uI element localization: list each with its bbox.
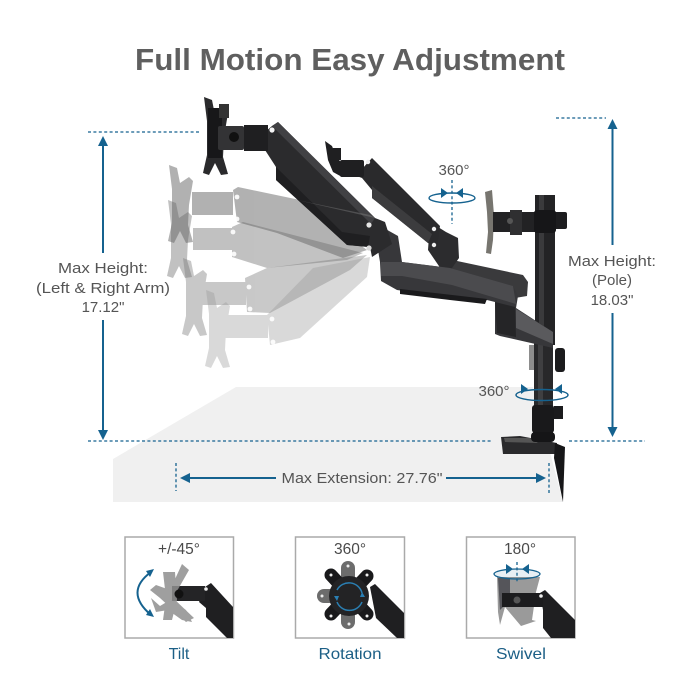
ghost pivots: [231, 195, 275, 344]
left height label: (Left & Right Arm): [36, 280, 170, 297]
panel: tilt: [125, 537, 234, 663]
right height label: (Pole): [592, 272, 632, 289]
panel: rotation: 360°: [334, 541, 366, 558]
upper arm: [265, 122, 392, 257]
right height dimension: [556, 118, 645, 441]
pole rotation 360 indicator: 360°: [478, 383, 510, 400]
ghost position 3: [182, 255, 367, 336]
first arm lower section: [378, 227, 553, 348]
ghost position 4: [205, 257, 370, 368]
ghost position 1: [168, 165, 367, 258]
right height label: Max Height:: [568, 253, 656, 270]
icon: tilting monitor mount: [138, 564, 233, 638]
right height label: 18.03": [591, 292, 633, 309]
left height label: Max Height:: [58, 260, 148, 277]
small monitor bracket: [325, 141, 364, 177]
right height label: [568, 253, 656, 309]
desk surface: [113, 387, 563, 502]
ghost position 2: [167, 200, 363, 278]
second arm rear: [325, 141, 528, 298]
left height dimension: [88, 132, 492, 441]
label: swivel: Swivel: [496, 646, 546, 663]
icon: rotating plate: [320, 564, 404, 638]
label: tilt: Tilt: [169, 646, 190, 663]
panel: swivel: 180°: [504, 541, 536, 558]
arm swivel 360 indicator: 360°: [438, 162, 470, 179]
panel: tilt: +/-45°: [158, 541, 200, 558]
label: rotation: Rotation: [318, 646, 382, 663]
max extension dimension: Max Extension: 27.76": [282, 470, 442, 487]
panel: swivel: [466, 537, 575, 663]
main arms: [203, 97, 553, 348]
arm swivel 360 indicator: [429, 162, 475, 224]
ghost arm positions: [167, 165, 370, 368]
icon: swivelling plate: [494, 562, 575, 638]
main monitor bracket: [203, 97, 268, 175]
left height label: [36, 260, 170, 316]
max extension dimension: [176, 463, 549, 494]
title: Full Motion Easy Adjustment: [135, 42, 565, 77]
clamp base: [501, 432, 565, 502]
third monitor plate and bracket: [485, 190, 567, 254]
left height label: 17.12": [82, 299, 124, 316]
panel: rotation: [296, 537, 404, 663]
pole with third monitor: [485, 190, 567, 502]
pole rotation 360 indicator: [478, 383, 568, 400]
